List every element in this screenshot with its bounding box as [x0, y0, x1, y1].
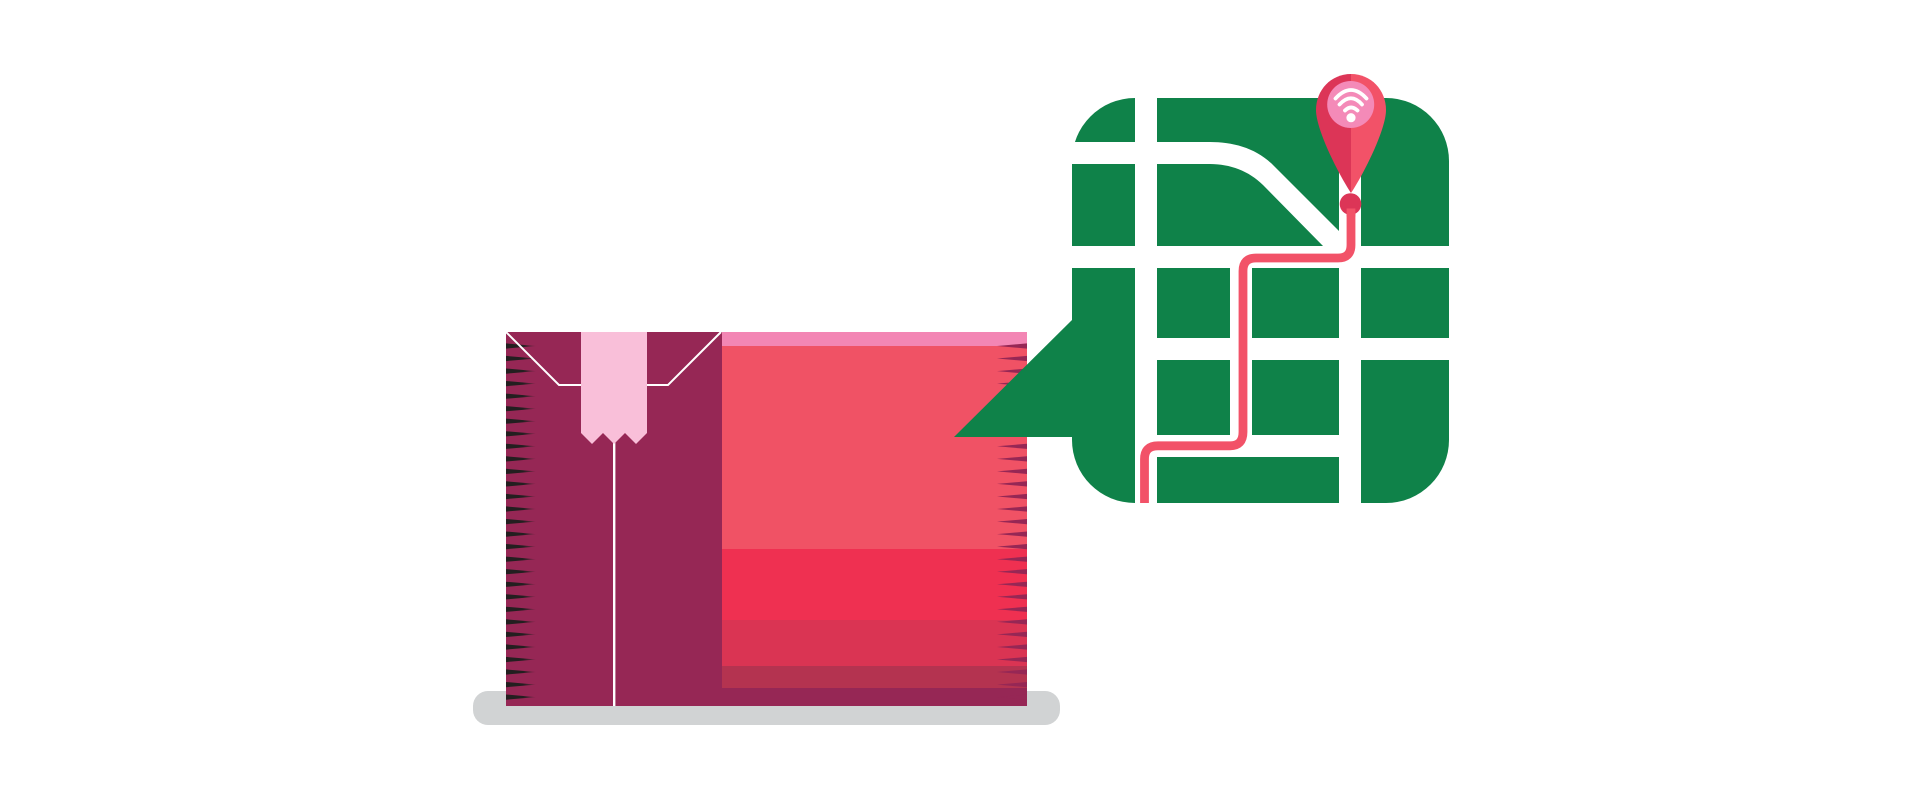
- box seam line: [613, 440, 615, 706]
- package box: [506, 332, 1027, 706]
- map pointer tail: [954, 319, 1073, 437]
- left edge zigzag ticks: [506, 343, 536, 700]
- location pin: [1316, 74, 1386, 216]
- route line: [1144, 208, 1351, 503]
- pin inner circle: [1327, 81, 1374, 128]
- panel: left box face: [506, 332, 722, 706]
- box shadow: [473, 691, 1060, 725]
- pin right half: [1351, 74, 1386, 193]
- packing tape tag: [581, 332, 647, 444]
- route start dot: [1340, 193, 1361, 215]
- right edge zigzag ticks: [997, 343, 1027, 700]
- map: [954, 98, 1449, 503]
- box flap outline: [506, 332, 721, 385]
- map base: [1072, 98, 1449, 503]
- route start segment: [1347, 208, 1355, 216]
- panel: right box face bands: [722, 332, 1027, 706]
- icon: wifi signal: [1336, 90, 1366, 122]
- map roads: [1060, 98, 1449, 503]
- pin left half: [1316, 74, 1351, 193]
